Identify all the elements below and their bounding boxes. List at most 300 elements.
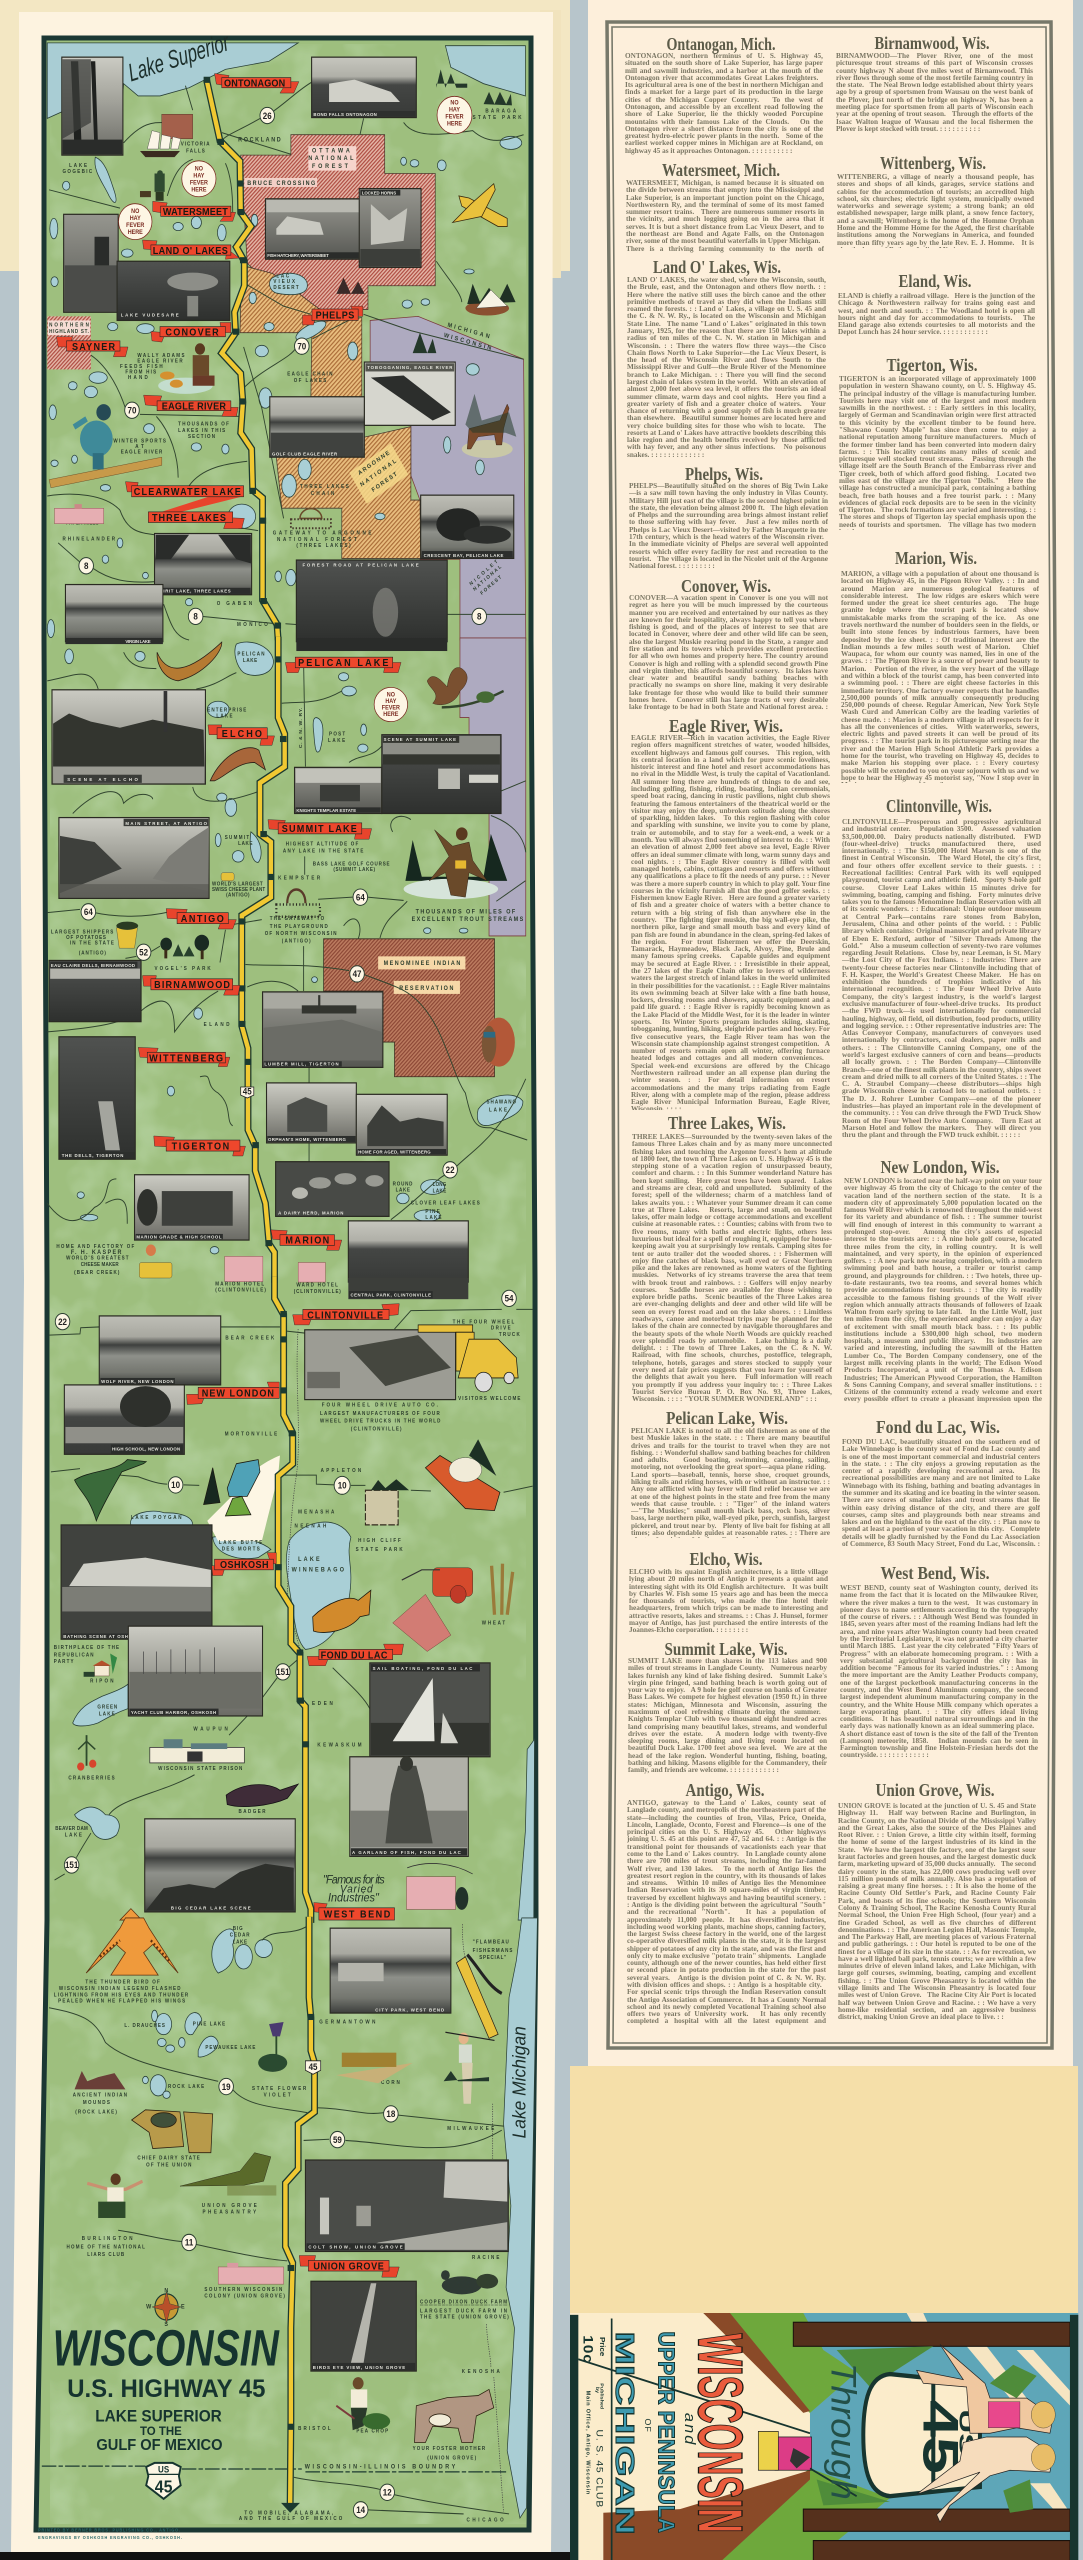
banner: Watersmeet (153, 201, 236, 221)
icon: Flambeau train (456, 1955, 502, 2038)
photo: scene at Summit Lake (382, 735, 501, 813)
photo: lake with log, top (65, 585, 163, 642)
route markers south: 22 (58, 1316, 67, 1327)
title: Wisconsin: WISCONSIN (53, 2320, 280, 2377)
route markers north: 8 (193, 611, 198, 622)
route markers north (79, 107, 486, 625)
icon: Kasper cheese (139, 1245, 172, 1278)
labels lower: TO MOBILE, ALABAMA, (244, 2510, 334, 2516)
labels north: RHINELANDER (63, 536, 116, 543)
photo: Summit Lake depot: KNIGHTS TEMPLAR ESTATE (296, 808, 356, 813)
labels lower: COLONY (UNION GROVE) (204, 2293, 285, 2300)
labels north: VIEUX (273, 279, 296, 285)
labels south: LAKE BUTTE (219, 1540, 263, 1546)
labels middle: HOME AND FACTORY OF (56, 1244, 135, 1250)
banner: Tigerton (154, 1136, 245, 1156)
labels middle: WORLD'S LARGEST (212, 882, 263, 888)
labels north: GATEWAY TO ARGONNE (273, 531, 372, 537)
guide section headings: Wittenberg, Wis. (880, 153, 986, 173)
labels north: SECTION (188, 434, 216, 440)
map background (36, 38, 536, 2530)
labels middle: (ANTIGO) (282, 938, 311, 945)
Lake Winnebago (286, 1522, 351, 1649)
banner: Ontonagon (215, 73, 299, 93)
highway 45 middle: 45 (243, 1086, 252, 1097)
icon: gateway arch (276, 890, 320, 917)
text block: Eland: ELAND is chiefly a railroad village. Here is the junction of the Chicago & Northwestern railway for trains going east and west, and north and south. : : The Woodland hotel is open all hours night and day for accommodations to tourists. The Eland garage also extends courtesies to all motorists and the Depot Lunch has 24 hour service. : : : : : : : : : : : (838, 293, 1035, 336)
labels middle: (SUMMIT LAKE) (333, 867, 375, 873)
photo: Three Lakes: SPIRIT LAKE, THREE LAKES (156, 588, 231, 594)
icon: US 45 shield: US (158, 2464, 169, 2475)
banner: Conover: CONOVER (165, 327, 219, 339)
labels north: (THREE LAKES) (296, 543, 351, 549)
labels north: NATIONAL (472, 564, 503, 593)
banner: Wittenberg (138, 1047, 230, 1067)
guide section headings: Eagle River, Wis. (669, 716, 783, 736)
labels lower: MOUNDS (83, 2100, 111, 2106)
labels north: LAC (276, 273, 290, 280)
route markers lower: 12 (383, 2487, 392, 2498)
labels lower: SOUTHERN WISCONSIN (204, 2287, 283, 2293)
labels north: NATIONAL FOREST (277, 537, 357, 543)
guide section headings: Summit Lake, Wis. (664, 1639, 788, 1659)
guide section headings: Tigerton, Wis. (886, 355, 978, 375)
banner: Wittenberg: WITTENBERG (149, 1053, 224, 1064)
cover: price: 10c (580, 2335, 595, 2363)
photo: lake with log, bottom (65, 638, 163, 644)
text block: Phelps: PHELPS—Beautifully situated on the shores of Big Twin Lake—is a saw mill town having the only industry in Vilas County. Military Hill just east of the village is the second highest point in the state, the elevation being almost 2000 ft. The high elevation of Phelps and the surrounding area brings almost instant relief to those suffering with hay fever. Just a few miles north of Phelps is Lac Vieux Desert—visited by Father Marquette in the 17th century, which is the head waters of the Wisconsin river. In the immediate vicinity of Phelps are several well appointed resorts which offer every facility for rest and recreation to the tourist. The village is located in the Nicolet unit of the Argonne National forest. : : : : : : : : : (629, 483, 828, 570)
labels middle: ENTERPRISE (207, 707, 247, 714)
photo: pines at Ontonagon (62, 57, 123, 155)
labels middle: VOGEL'S PARK (155, 966, 211, 972)
text block: Ontonagon: ONTONAGON, northern terminus of U. S. Highway 45, situated on the south shore of Lake Superior, has large paper mill and sawmill industries, and a harbor at the mouth of the Ontonagon river that accommodates Great Lakes freighters. Its agricultural area is one of the best in northern Michigan and finds a market for a large part of its production in the large cities of the Michigan Copper Country. To the west of Ontonagon, and accessible by an excellent road following the shore of Lake Superior, lie the thickly wooded Porcupine mountains with their famous Lake of the Clouds. On the Ontonagon river a short distance from the city is one of the greatest hydro-electric power plants in the north. Some of the earliest worked copper mines in Michigan are at Rockland, on highway 45 as it approaches Ontonagon. : : : : : : : : : : (625, 53, 823, 155)
guide section headings: Three Lakes, Wis. (668, 1113, 786, 1133)
icon: foster mother cow (415, 2389, 494, 2442)
labels south: MARION HOTEL (215, 1281, 264, 1288)
photo: tobogganing Eagle River (364, 362, 455, 425)
labels middle: BASS LAKE GOLF COURSE (313, 862, 390, 868)
icon: cranberries (77, 1735, 96, 1771)
photo: Birds eye view Union Grove: BIRDS EYE VIEW, UNION GROVE (313, 2365, 405, 2370)
labels lower: LARGEST DUCK FARM IN (420, 2308, 507, 2314)
labels lower: L. DRAUCHES (124, 2023, 166, 2029)
purple region continued (460, 638, 526, 936)
photo: High School New London: HIGH SCHOOL, NEW LONDON (112, 1446, 181, 1452)
labels north: OF LAKES (294, 378, 327, 384)
no hay fever badges: NO (450, 100, 459, 107)
labels south: WHEEL DRIVE TRUCKS IN THE WORLD (320, 1418, 441, 1425)
cover base (570, 2313, 1078, 2560)
labels north: WISCONSIN (443, 333, 492, 352)
labels middle: LAKE (425, 1215, 442, 1221)
labels north: STATE PARK (473, 115, 522, 121)
icon: deer (462, 394, 516, 458)
map section one: Lake Superior to Monico (47, 28, 526, 642)
photo: City Park West Bend (330, 1928, 451, 2013)
labels north: GOGEBIC (63, 169, 93, 175)
rivers and roads (47, 82, 525, 640)
photo: Marion grade and high school (135, 1175, 249, 1240)
labels lower: CORN (381, 2080, 400, 2086)
photo: Bond Falls Ontonagon (312, 57, 416, 118)
labels middle: CHEESE MAKER (81, 1262, 119, 1268)
icon: compass: N (164, 2288, 169, 2294)
icon: thunderbird top (120, 1909, 142, 1920)
labels south: FOUR WHEEL DRIVE AUTO CO. (322, 1402, 439, 1409)
photo: Colt show Union Grove (305, 2160, 508, 2251)
banner: Eagle River (144, 395, 238, 416)
banner: Clearwater Lake and Three Lakes: CLEARWATER LAKE (134, 487, 241, 498)
photo: golf club Eagle River (270, 397, 364, 457)
photo: Yacht Club Harbor (128, 1626, 263, 1716)
photo: golf club Eagle River: GOLF CLUB EAGLE RIVER (272, 451, 338, 457)
banners south (187, 1304, 404, 1921)
photo: Big Cedar Lake scene top (145, 1819, 295, 1912)
icon: Marion hotels (225, 1256, 325, 1282)
labels middle: (ANTIGO) (226, 893, 250, 899)
icon: trout (210, 748, 265, 781)
photo: Marion grade and high school: MARION GRADE & HIGH SCHOOL (136, 1234, 222, 1239)
banner: Phelps: PHELPS (316, 310, 355, 322)
subtitle: Lake Superior to the Gulf of Mexico: LAKE SUPERIOR (95, 2408, 222, 2426)
no hay fever badges: HAY (193, 173, 205, 180)
labels lower: CEDAR (230, 1933, 250, 1939)
labels middle: EXCELLENT TROUT STREAMS (412, 917, 524, 923)
lakes: PELICAN (237, 651, 265, 658)
subtitle: Lake Superior to the Gulf of Mexico: GULF OF MEXICO (96, 2437, 223, 2454)
labels south: (CLINTONVILLE) (294, 1289, 341, 1295)
icon: airplane (453, 184, 507, 227)
labels south: LAKE (99, 1711, 115, 1718)
banner: Birnamwood (143, 976, 240, 995)
Menominee Indian Reservation: MENOMINEE INDIAN (384, 961, 461, 967)
labels north: FEEDS FISH (120, 364, 163, 370)
photo: Lake Vudesare: LAKE VUDESARE (121, 312, 179, 317)
labels south: Varied (340, 1883, 374, 1895)
labels north (63, 108, 522, 628)
labels lower: HOME OF THE NATIONAL (67, 2244, 145, 2251)
route markers north: 26 (263, 110, 272, 121)
Ottawa National Forest: OTTAWA (312, 148, 351, 155)
photo: scene at Elcho (52, 690, 205, 784)
route markers middle: 22 (446, 1165, 455, 1175)
cover pin-up figures (917, 2344, 1055, 2522)
icon: badger (226, 1784, 298, 1807)
photo: Main Street at Antigo (59, 818, 209, 898)
icon: dairy cows (132, 2110, 213, 2153)
photo: the Dells Tigerton (59, 1037, 135, 1159)
labels middle: SWISS CHEESE PLANT (212, 887, 265, 893)
Wisconsin-Illinois boundary line (42, 2466, 506, 2472)
icon: blue car and green tractor on road (204, 1460, 260, 1516)
banner: Conover (151, 322, 231, 342)
banner: Clearwater Lake and Three Lakes (125, 482, 244, 529)
labels middle: ROUND (393, 1181, 413, 1187)
labels south: MENASHA (298, 1509, 335, 1516)
banner: Ontonagon: ONTONAGON (224, 78, 286, 90)
banner: Clearwater Lake and Three Lakes: THREE LAKES (152, 512, 227, 524)
photo: Sail boating Fond du Lac: SAIL BOATING, FOND DU LAC (373, 1666, 473, 1671)
photo: Eau Claire Dells Birnamwood (49, 960, 141, 1022)
route markers lower: 14 (356, 2505, 365, 2515)
icon: pheasant (180, 2153, 276, 2196)
guide section headings: Eland, Wis. (898, 271, 972, 291)
Argonne National Forest: ARGONNE (357, 450, 391, 477)
labels middle: OF POTATOES (66, 935, 107, 941)
route markers south: 10 (338, 1480, 347, 1491)
Ottawa National Forest (241, 135, 435, 309)
no hay fever badge: HAY (385, 699, 396, 705)
labels middle: POST (329, 731, 345, 738)
booklet cover, rotated art (570, 2313, 1078, 2560)
labels north: THREE LAKES (300, 484, 350, 490)
rivers and roads (47, 652, 527, 1224)
cover vintage car (758, 2431, 812, 2470)
icon: compass: S (164, 2322, 168, 2328)
labels south: Industries" (328, 1892, 380, 1904)
subtitle: Lake Superior to the Gulf of Mexico: TO THE (140, 2426, 182, 2438)
labels north: O GABEN (217, 601, 253, 607)
labels south: BEAR CREEK (225, 1335, 275, 1342)
route markers north: 70 (128, 405, 137, 416)
icon: squirrel and branch (427, 668, 504, 707)
banner: Fond du Lac (307, 1644, 404, 1666)
labels lower: BRISTOL (298, 2426, 331, 2432)
guide section headings (653, 33, 1000, 1800)
route markers lower (182, 2078, 398, 2518)
icon: muskie fish (157, 642, 222, 681)
text block: Union Grove: UNION GROVE is located at the junction of U. S. 45 and State Highway 11. Half way between Racine and Burlington, in Racine County, on the National Divide of the Mississippi Valley and the Great Lakes, also the source of the Des Plaines and Root River. : : Union Grove, a little city within itself, forming the home of some of the largest industries of its kind in the State. We have the largest tile factory, one of the largest sour kraut factories and green houses, and the largest domestic duck farm, marketing upward of 35,000 ducks annually. The second dairy county in the state, has 22,000 cows producing well over 115 million pounds of milk annually. Also has a reputation of raising a great many fine horses. : : It is also the home of the Racine County Old Settler's Park, and Racine County Fair Park, and boasts of its fine schools; the Southern Wisconsin Colony & Training School, The Racine Kenosha County Rural Normal School, the Union Free High School, (four year) and a fine Graded School, as well as five churches of different denominations. : : The American Legion Hall, Masonic Temple, and The Parkway Hall, are meeting places of various Fraternal and public gatherings. : : Our hotel is reputed to be one of the finest for a village of its size in the state. : : As for recreation, we have a well lighted ball park, tennis courts; we are within a few minutes drive of eleven inland lakes, and Lake Michigan, with large golf courses, swimming, boating, camping and excellent fishing. : : The Union Grove Pheasantry is located within the village limits and The Wisconsin Pheasantry is located four miles west of Union Grove. The Racine City Air Port is located half way between Union Grove and Racine. : : We have a very home-like residential section, and an aggressive business district, making Union Grove an ideal place to live. : : (838, 1803, 1036, 2021)
guide section headings: Birnamwood, Wis. (874, 33, 990, 53)
banners north (56, 73, 363, 529)
labels south: LAKE POYGAN (131, 1515, 182, 1521)
banner: Phelps (303, 306, 363, 325)
labels lower: PINE LAKE (193, 2021, 226, 2027)
icon: Wisconsin state prison (150, 1739, 244, 1763)
icon: fisherman in stream (404, 827, 507, 899)
cover: publisher: Main Office, Antigo, Wisconsin (585, 2391, 590, 2494)
Lake Michigan upper (518, 1739, 534, 1920)
route markers lower: 11 (185, 2237, 194, 2248)
icon: FWD truck (418, 1325, 518, 1392)
banner: Oshkosh (212, 1553, 276, 1576)
highway 45 north (204, 77, 281, 640)
labels lower: CHIEF DAIRY STATE (137, 2155, 200, 2162)
Argonne National Forest: FOREST (371, 471, 399, 494)
labels middle: KEMPSTER (278, 875, 321, 882)
labels middle: C. & N. W. RY. (298, 707, 304, 748)
labels south (54, 1281, 521, 1904)
photo: Wolf River New London: WOLF RIVER, NEW LONDON (101, 1379, 174, 1384)
icon: pea farmer (336, 2377, 390, 2430)
labels lower: ROCK LAKE (168, 2084, 205, 2090)
no hay fever badges: NO (131, 209, 140, 215)
banner: West Bend (314, 1903, 395, 1921)
cover: publisher: by (594, 2387, 600, 2393)
icon: national liars club man (87, 2173, 143, 2218)
highway 45 end: 45 (309, 2061, 318, 2072)
labels north: FROM HIS (125, 369, 157, 376)
labels middle: THE GATEWAY TO (270, 916, 324, 922)
labels lower: PEA CROP (356, 2428, 389, 2435)
labels north: HAND (128, 375, 148, 381)
icon: paper mill and ship (140, 114, 193, 157)
icon: compass: E (181, 2304, 185, 2311)
guide section headings: Pelican Lake, Wis. (666, 1408, 788, 1428)
guide text sheet paper (588, 0, 1074, 2068)
photo: Crescent Bay Pelican Lake (421, 495, 514, 558)
photo: home for aged Wittenberg: HOME FOR AGED, WITTENBERG (358, 1149, 431, 1155)
photo: scene at Elcho: SCENE AT ELCHO (67, 777, 138, 782)
labels south: BIRTHPLACE OF THE (54, 1645, 120, 1651)
labels lower: (UNION GROVE) (427, 2455, 476, 2462)
icon: limestone cliff (365, 1479, 409, 1525)
icon: Native American chief (482, 1018, 515, 1067)
map sheet paper (11, 12, 556, 2552)
labels middle: THOUSANDS OF MILES OF (416, 909, 516, 916)
cover: price (580, 2335, 607, 2363)
labels lower: ANCIENT INDIAN (73, 2093, 128, 2099)
photo: the Dells Tigerton: THE DELLS, TIGERTON (62, 1153, 124, 1158)
labels lower: PHEASANTRY (203, 2209, 257, 2216)
photo: Bathing scene at Oshkosh: BATHING SCENE AT OSHKOSH (63, 1634, 144, 1639)
text block: Elcho: ELCHO with its quaint English architecture, is a little village lying about 20 miles north of Antigo it presents a quaint and interesting sight with its Old English architecture. It was built by Charles W. Fish some 15 years ago and has been the mecca for thousands of tourists, who made the fine hotel their headquarters, from which trips can be made to interesting and attractive resorts, lakes and streams. : : Chas J. Hunsel, former mayor of Antigo, has just purchased the entire interests of the Joannes-Elcho corporation. : : : : : : : : (629, 1569, 828, 1634)
icon: US 45 shield: 45 (155, 2476, 173, 2497)
photo: City Park West Bend: CITY PARK, WEST BEND (375, 2007, 445, 2012)
no hay fever badge (374, 687, 408, 722)
photo: A garland of fish: A GARLAND OF FISH, FOND DU LAC (352, 1850, 461, 1855)
icon: gateway building (291, 509, 331, 528)
labels south: APPLETON (321, 1468, 362, 1474)
photo: Bathing scene at Oshkosh (61, 1525, 212, 1639)
labels middle: LAKE (328, 738, 346, 744)
labels south: (CLINTONVILLE) (351, 1426, 402, 1433)
photo: Wolf River New London (99, 1316, 221, 1385)
map mottling (50, 44, 526, 2524)
labels north: THOUSANDS OF (178, 422, 229, 428)
cover: publisher: Published (599, 2383, 604, 2409)
photo: Central Park Clintonville bottom: CENTRAL PARK, CLINTONVILLE (351, 1293, 431, 1298)
no hay fever badges: HAY (449, 107, 460, 114)
route markers south: 151 (65, 1860, 79, 1870)
labels south: DRIVE (491, 1325, 511, 1332)
icon: Wally Adams feeding fish (158, 343, 215, 394)
icon: Ripon house (84, 1654, 117, 1677)
photo: scene at Summit Lake: SCENE AT SUMMIT LAKE (384, 737, 456, 742)
labels south: WAUPUN (193, 1726, 228, 1733)
labels middle (51, 707, 524, 1276)
icon: ducks (441, 2270, 498, 2294)
photo: Colt show Union Grove: COLT SHOW, UNION GROVE (308, 2244, 403, 2250)
labels north: LAKES IN THIS (178, 428, 226, 434)
subtitle: U.S. Highway 45: U.S. HIGHWAY 45 (67, 2375, 265, 2403)
photo: lake with log, bottom: VIRGIN LAKE (125, 639, 151, 644)
labels lower: "FLAMBEAU (473, 1939, 509, 1946)
guide section headings: Phelps, Wis. (685, 464, 763, 484)
Lake Superior (47, 28, 525, 118)
banner: Land O' Lakes (143, 240, 239, 259)
labels south: BADGER (239, 1809, 266, 1815)
labels south: HIGH CLIFF (358, 1538, 401, 1544)
banner: Antigo (166, 909, 236, 929)
photo: dairy herd Marion (276, 1162, 389, 1216)
route markers south: 54 (505, 1293, 514, 1304)
photo: dairy herd Marion: A DAIRY HERD, MARION (278, 1210, 344, 1215)
photo: Three Lakes (155, 534, 252, 595)
route markers north: 70 (297, 341, 306, 352)
labels south: NEENAH (295, 1523, 327, 1529)
labels south: PARTY (54, 1659, 74, 1665)
labels north: WALLY ADAMS (137, 353, 185, 359)
labels south: VISITORS WELCOME (458, 1396, 521, 1402)
lakes: SHAWANO (486, 1099, 516, 1106)
Northern Highland state forest (47, 316, 91, 369)
no hay fever badges: HAY (130, 216, 141, 222)
Lake Michigan lower: Lake Michigan (510, 2026, 530, 2138)
labels south: EDEN (312, 1701, 333, 1707)
route markers south (55, 1290, 516, 1873)
lakes: LAKE (489, 1107, 508, 1114)
icon: violet flower (258, 2022, 287, 2072)
icon: West Bend factory (407, 1863, 473, 1910)
banner: Tigerton: TIGERTON (172, 1141, 230, 1153)
route markers lower: 59 (333, 2134, 342, 2145)
photo: Birds eye view Union Grove (311, 2281, 416, 2371)
banner: West Bend: WEST BEND (324, 1909, 391, 1921)
photo: deer in forest (64, 214, 118, 312)
photo: forest road at Pelican Lake, top (296, 560, 447, 642)
labels north: FOREST (479, 574, 503, 597)
cover: publisher (585, 2383, 604, 2508)
labels middle: (BEAR CREEK) (74, 1270, 120, 1276)
no hay fever badges: NO (195, 166, 203, 173)
lakes (143, 1929, 272, 2098)
labels middle: ANY LAKE IN THE STATE (283, 848, 364, 854)
banner: Watersmeet: WATERSMEET (163, 207, 228, 218)
Argonne National Forest: NATIONAL (359, 458, 398, 489)
labels lower: (ROCK LAKE) (75, 2109, 117, 2116)
route markers middle: 64 (84, 907, 93, 917)
labels north: AT (135, 444, 144, 450)
labels south: THE FOUR WHEEL (453, 1319, 514, 1325)
cover road lines (578, 2319, 857, 2560)
route markers middle: 47 (353, 969, 362, 979)
labels middle: (ANTIGO) (79, 950, 106, 956)
route markers middle (81, 889, 457, 1178)
labels south: BEAVER DAM (55, 1826, 88, 1832)
labels north: EAGLE CHAIN (287, 371, 333, 378)
bottom dark edge (0, 2552, 570, 2560)
printer credit: PRINTED BY BERNER BROS. PUBLISHING CO., ANTIGO. (38, 2527, 180, 2533)
guide text double frame (607, 22, 1056, 2048)
labels middle: IN THE STATE (70, 940, 115, 947)
guide section headings: Conover, Wis. (681, 576, 771, 596)
guide section headings: Clintonville, Wis. (886, 796, 992, 816)
labels north: CHAIN (311, 491, 335, 497)
text block: West Bend: WEST BEND, county seat of Washington county, derived its name from the fact that it is located on the Milwaukee River, where the river makes a turn to the west. It was customary in pioneer days to name settlements according to the typography of the course of rivers. : : Although West Bend was founded in 1845, seven years after most of the roaming Indians had left the area, and nine years after Washington county had been created by the Territorial Legislature, it was not granted a city charter until March 1885. Last year the city celebrated "Fifty Years of Progress" with an elaborate homecoming program. : : With a very substantial agricultural background the city has in addition become "Famous for its varied industries." : : Among the more important are the Amity Leather Products company, one of the largest pocketbook manufacturing concerns in the country, and the West Bend Aluminum company, the second largest independent aluminum manufacturing company in the country, and the White House Milk company which operates a large evaporating plant. : : The city offers ideal living conditions. It has beautiful natural surroundings and in the early days was nationally known as an ideal summering place. A short distance east of town is the site of the fall of the Trenton (Lampson) meteorite, 1858. Indian mounds can be seen in Farmington township and fine Holstein-Friesian herds dot the countryside. : : : : : : : : : : : : (840, 1585, 1038, 1759)
banner: Pelican Lake: PELICAN LAKE (298, 658, 389, 669)
route markers north: 8 (477, 611, 482, 622)
cover sky stripes (907, 2313, 1070, 2513)
cover US 45 shield: US (955, 2409, 978, 2455)
photo: Crescent Bay Pelican Lake: CRESCENT BAY, PELICAN LAKE (424, 553, 504, 558)
guide section headings: Antigo, Wis. (686, 1780, 764, 1800)
cover: of: OF (643, 2418, 653, 2432)
banner: Elcho (208, 725, 275, 745)
labels north: MONICO (237, 622, 268, 628)
photo: lumber mill Tigerton (263, 992, 383, 1067)
photo: lumber mill Tigerton: LUMBER MILL, TIGERTON (264, 1062, 339, 1067)
